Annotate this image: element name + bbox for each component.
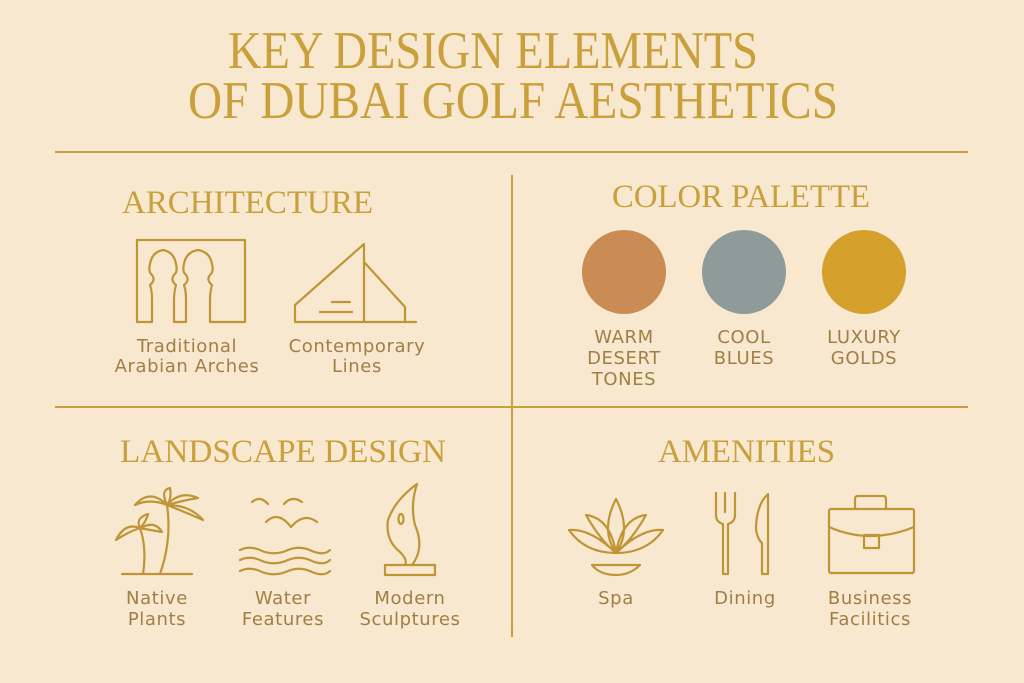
- icon: water: [240, 499, 330, 574]
- panel: color palette: [582, 179, 906, 390]
- swatch labels: COOL: [717, 327, 771, 348]
- heading: color palette: COLOR PALETTE: [612, 179, 870, 215]
- icon: spa lotus: [569, 499, 663, 575]
- swatch labels: WARM: [594, 327, 654, 348]
- panel: amenities: [569, 434, 914, 630]
- swatch labels: LUXURY: [827, 327, 901, 348]
- labels: landscape: Native: [126, 588, 188, 609]
- label: arches: Traditional: [136, 336, 237, 357]
- icon: palms: [116, 488, 203, 574]
- swatch: warm desert: [582, 230, 666, 314]
- title: [188, 22, 838, 130]
- panel: landscape design: Sculptures: [359, 609, 461, 630]
- panel: architecture: [115, 185, 425, 377]
- panel: amenities: Business: [828, 588, 912, 609]
- panel: architecture: Lines: [332, 356, 382, 377]
- icon: dining: [716, 493, 768, 574]
- title: KEY DESIGN ELEMENTS: [228, 22, 758, 80]
- panel: landscape design: Modern: [374, 588, 446, 609]
- heading: amenities: AMENITIES: [658, 434, 835, 470]
- heading: architecture: ARCHITECTURE: [122, 185, 373, 221]
- panel: architecture: Arabian Arches: [115, 356, 259, 377]
- swatch labels: TONES: [591, 369, 656, 390]
- icon: briefcase: [829, 496, 914, 573]
- panel: landscape design: Features: [242, 609, 324, 630]
- icon: arches: [137, 240, 245, 322]
- swatch: cool blues: [702, 230, 786, 314]
- swatch labels: [587, 327, 901, 390]
- swatch labels: DESERT: [587, 348, 661, 369]
- panel: amenities: Dining: [714, 588, 776, 609]
- swatch labels: GOLDS: [831, 348, 897, 369]
- panel: landscape design: Plants: [128, 609, 186, 630]
- labels: amenities: Spa: [598, 588, 634, 609]
- title: OF DUBAI GOLF AESTHETICS: [188, 72, 838, 130]
- icon: sculpture: [385, 484, 435, 575]
- icon: contemporary lines: [295, 244, 416, 322]
- panel: amenities: Facilitics: [829, 609, 911, 630]
- swatch labels: BLUES: [714, 348, 774, 369]
- heading: landscape: LANDSCAPE DESIGN: [120, 434, 446, 470]
- label: contemporary: Contemporary: [289, 336, 425, 357]
- swatch: luxury golds: [822, 230, 906, 314]
- panel: landscape design: Water: [255, 588, 311, 609]
- panel: landscape design: [116, 434, 461, 630]
